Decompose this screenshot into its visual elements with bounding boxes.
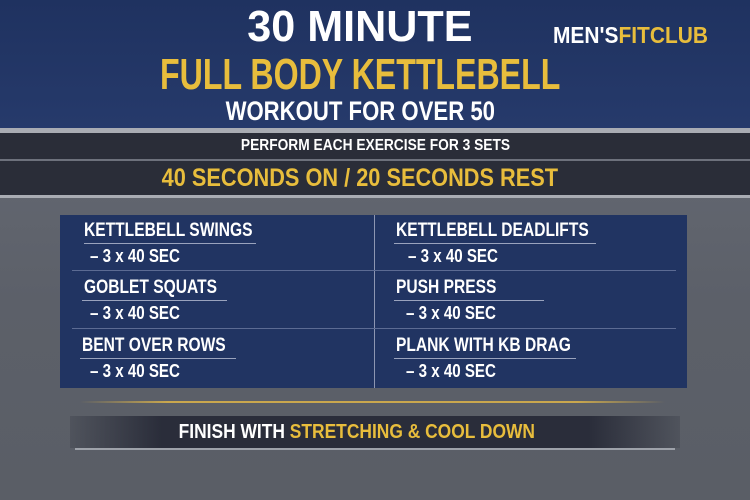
exercise: swings: – 3 x 40 SEC xyxy=(90,246,180,266)
header panel xyxy=(0,0,750,128)
band: intervals: 40 SECONDS ON / 20 SECONDS REST xyxy=(162,164,558,192)
exercise: plank: – 3 x 40 SEC xyxy=(406,361,496,381)
exercise: push press: PUSH PRESS xyxy=(396,277,496,298)
exercise: goblet squats xyxy=(82,277,227,323)
band: intervals xyxy=(0,161,750,195)
exercise: goblet squats: – 3 x 40 SEC xyxy=(90,303,180,323)
exercise: deadlifts: – 3 x 40 SEC xyxy=(408,246,498,266)
finish banner: FINISH WITH STRETCHING & COOL DOWN xyxy=(179,421,535,443)
exercise: deadlifts: KETTLEBELL DEADLIFTS xyxy=(396,220,589,241)
exercise: plank xyxy=(394,335,576,381)
finish banner xyxy=(70,416,680,448)
exercise: push press: – 3 x 40 SEC xyxy=(406,303,496,323)
exercise: deadlifts xyxy=(394,220,596,266)
title line 1: 30 MINUTE xyxy=(247,2,473,51)
exercise: swings xyxy=(84,220,256,266)
exercise: bent over rows: – 3 x 40 SEC xyxy=(90,361,180,381)
band: perform sets: PERFORM EACH EXERCISE FOR 3 SETS xyxy=(240,137,510,154)
exercise: bent over rows xyxy=(80,335,236,381)
exercise: bent over rows: BENT OVER ROWS xyxy=(82,335,226,356)
exercise: goblet squats: GOBLET SQUATS xyxy=(84,277,217,298)
band: perform sets xyxy=(0,133,750,159)
exercise table xyxy=(60,215,687,388)
title line 3: WORKOUT FOR OVER 50 xyxy=(225,96,495,126)
exercise: push press xyxy=(394,277,544,323)
logo: MEN'SFITCLUB xyxy=(553,22,708,48)
exercise: swings: KETTLEBELL SWINGS xyxy=(84,220,252,241)
title line 2: FULL BODY KETTLEBELL xyxy=(160,50,560,99)
exercise: plank: PLANK WITH KB DRAG xyxy=(396,335,571,356)
